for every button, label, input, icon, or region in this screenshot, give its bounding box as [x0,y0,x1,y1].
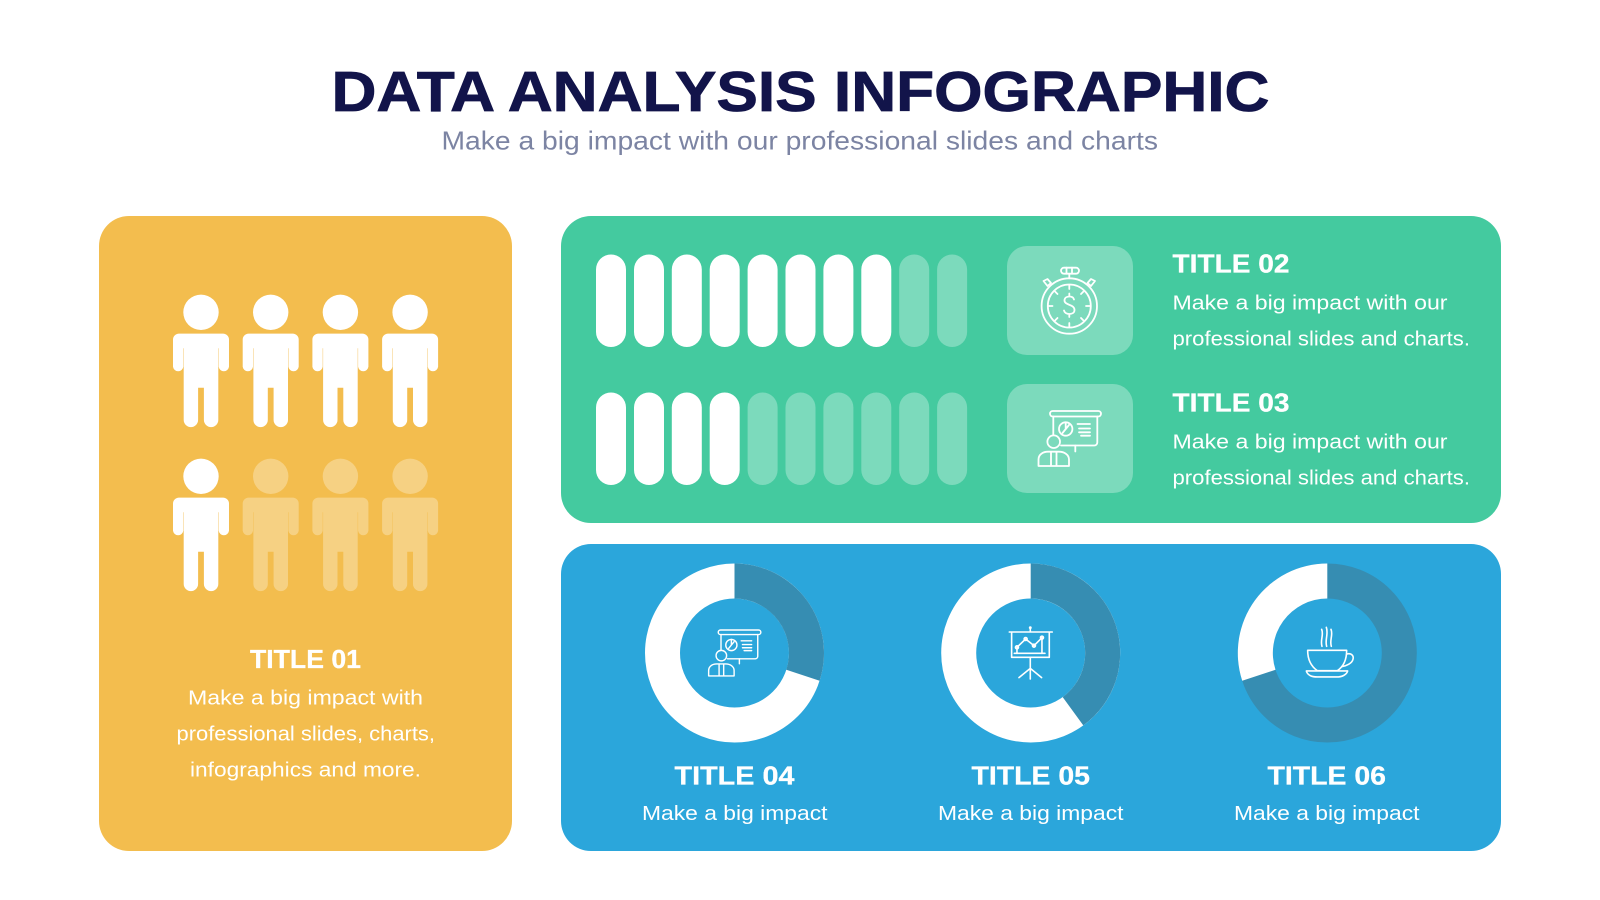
text block: title 01 description [176,686,435,782]
icon: presenter at board [1038,411,1101,466]
text: title 06 description: Make a big impact [1234,802,1420,825]
icon tile: presenter [1007,384,1133,493]
text block: title 03 description: professional slides and charts. [1172,467,1470,490]
title: DATA ANALYSIS INFOGRAPHIC [332,60,1270,124]
donut chart: title 04 [662,564,824,725]
icon: coffee cup [1306,627,1353,677]
heading: title 05: TITLE 05 [972,760,1090,790]
text block: title 01 description: Make a big impact with [188,686,423,710]
text block: title 02 description [1172,292,1470,351]
donut chart: title 05 [959,564,1120,725]
panel: title 01 yellow [99,216,512,851]
text block: title 03 description [1172,430,1470,490]
text block: title 03 description: Make a big impact with our [1172,430,1448,454]
text block: title 02 description: professional slides and charts. [1172,328,1470,351]
panel: titles 04 to 06 blue [561,544,1501,851]
text: title 05 description: Make a big impact [938,802,1124,825]
panel: titles 02 and 03 green [561,216,1501,523]
heading: title 02: TITLE 02 [1172,249,1290,279]
subtitle: Make a big impact with our professional slides and charts [442,126,1158,156]
bar chart: title 03, 4 of 10 [596,392,967,485]
donut chart: title 06 [1238,564,1399,725]
bar chart: title 02, 8 of 10 [596,254,967,347]
text: title 04 description: Make a big impact [642,802,828,825]
heading: title 03: TITLE 03 [1172,388,1290,418]
icon tile: stopwatch [1007,246,1133,355]
icon: easel with line chart [1009,627,1052,679]
heading: title 06: TITLE 06 [1268,760,1386,790]
icon: stopwatch with dollar [1042,268,1097,334]
pictogram: eight people, five highlighted [173,295,438,591]
text block: title 01 description: professional slides, charts, [176,722,435,746]
text block: title 01 description: infographics and more. [190,758,421,782]
heading: title 01: TITLE 01 [250,644,361,674]
heading: title 04: TITLE 04 [674,760,795,790]
icon: presenter at board [709,630,761,676]
text block: title 02 description: Make a big impact with our [1172,292,1448,314]
